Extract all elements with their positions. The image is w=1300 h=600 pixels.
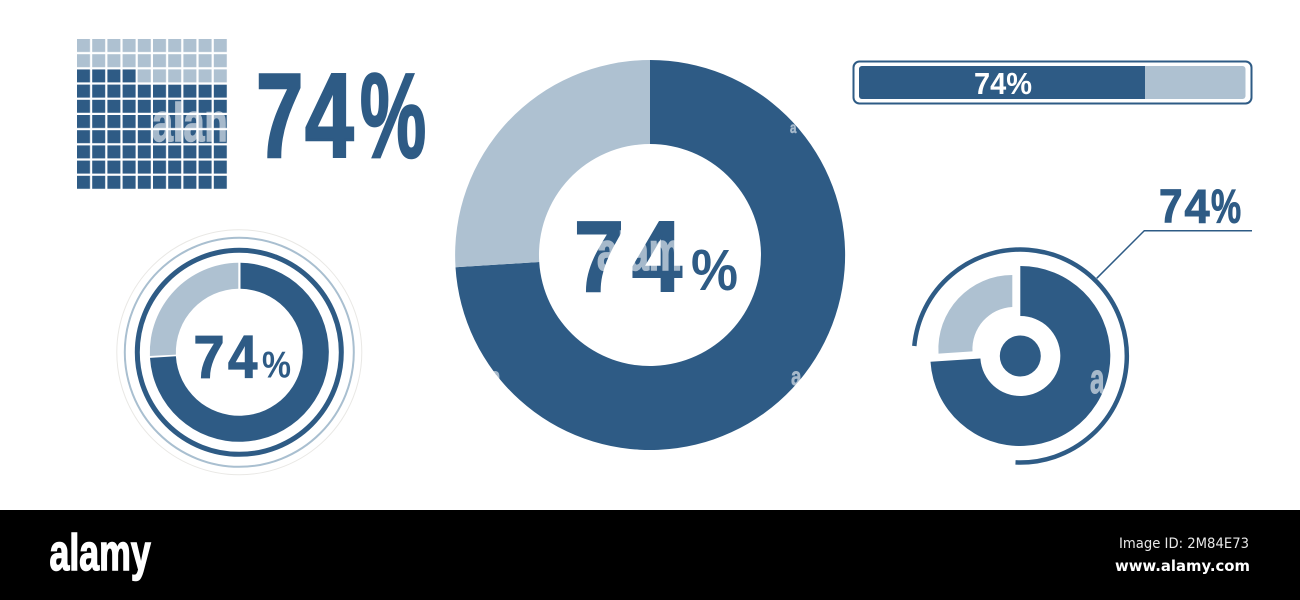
thin light ring bbox=[125, 238, 354, 467]
waffle chart: 74 of 100 cells bbox=[77, 39, 229, 191]
watermark fragments: a bbox=[1090, 356, 1105, 403]
donut dark segment 74% bbox=[456, 60, 845, 450]
central 74% label: 4 bbox=[632, 202, 682, 313]
ring donut label: % bbox=[262, 344, 291, 386]
large condensed 74% label: % bbox=[360, 50, 426, 183]
offset segment donut with callout bbox=[914, 180, 1252, 463]
large condensed 74% label bbox=[256, 50, 426, 184]
large condensed 74% label: 7 bbox=[256, 50, 303, 184]
central 74% label: 7 bbox=[574, 202, 624, 313]
ring donut label bbox=[194, 323, 291, 391]
callout 74% label bbox=[1159, 180, 1241, 233]
black footer band bbox=[0, 510, 1300, 600]
bar fill 74% bbox=[859, 66, 1145, 99]
ring donut light segment bbox=[150, 263, 238, 356]
callout leader line bbox=[1097, 231, 1252, 278]
watermark fragments bbox=[152, 92, 1105, 403]
central donut chart bbox=[455, 60, 845, 450]
ring donut label: 4 bbox=[228, 323, 258, 390]
progress bar bbox=[854, 62, 1252, 104]
waffle dark cells bbox=[77, 69, 229, 191]
callout 74% label: 4 bbox=[1184, 180, 1210, 233]
website url: www.alamy.com bbox=[1115, 557, 1250, 575]
donut light segment 26% bbox=[455, 60, 650, 267]
bar label: 74% bbox=[974, 66, 1032, 101]
alamy logo: alamy bbox=[50, 525, 151, 582]
watermark fragments: alan bbox=[152, 92, 228, 153]
ring donut dark segment bbox=[150, 263, 329, 442]
dark segment bbox=[930, 266, 1110, 446]
centre dot bbox=[1000, 336, 1041, 376]
thick dark ring bbox=[137, 250, 341, 454]
central 74% label bbox=[574, 202, 738, 313]
central 74% label: % bbox=[691, 238, 738, 303]
ring donut label: 7 bbox=[194, 325, 225, 391]
watermark fragments: a bbox=[791, 361, 802, 391]
large condensed 74% label: 4 bbox=[305, 50, 354, 183]
watermark fragments: a bbox=[490, 361, 501, 391]
callout 74% label: % bbox=[1211, 180, 1241, 233]
bar frame bbox=[854, 62, 1252, 104]
bar remainder bbox=[859, 66, 1246, 99]
outer arc bbox=[914, 250, 1127, 463]
faint outer ring bbox=[117, 230, 362, 475]
ringed donut chart bbox=[117, 230, 362, 475]
watermark fragments: a bbox=[790, 118, 797, 136]
callout 74% label: 7 bbox=[1159, 182, 1183, 233]
light segment bbox=[938, 275, 1012, 354]
watermark fragments: alam bbox=[597, 221, 682, 282]
waffle light cells bbox=[77, 39, 229, 85]
image id: Image ID: 2M84E73 bbox=[1119, 536, 1249, 552]
